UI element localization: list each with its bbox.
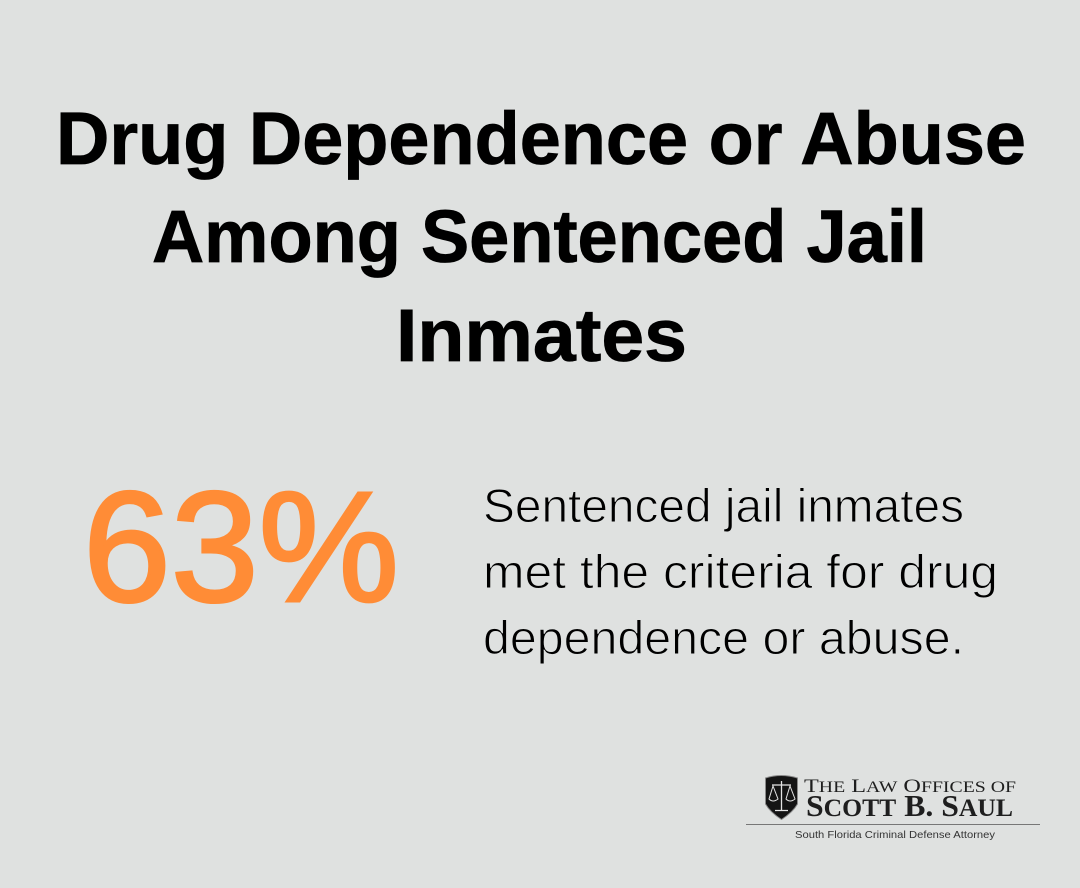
statistic description: Sentenced jail inmates: [483, 479, 964, 532]
statistic description: met the criteria for drug: [483, 545, 998, 598]
logo firm name: THE L AW O FFICES OF: [804, 776, 1016, 797]
statistic: 63%: 63%: [83, 460, 399, 635]
law firm logo: [746, 776, 1040, 841]
title: Among Sentenced Jail: [152, 195, 927, 278]
statistic description: dependence or abuse.: [483, 611, 964, 664]
logo tagline: South Florida Criminal Defense Attorney: [795, 829, 996, 841]
title: Inmates: [396, 294, 687, 377]
logo firm name: SCOTT B. SAUL: [806, 788, 1013, 823]
title: [56, 97, 1026, 377]
statistic description: [483, 479, 998, 664]
icon: scales of justice shield: [766, 776, 798, 820]
title: Drug Dependence or Abuse: [56, 97, 1026, 180]
